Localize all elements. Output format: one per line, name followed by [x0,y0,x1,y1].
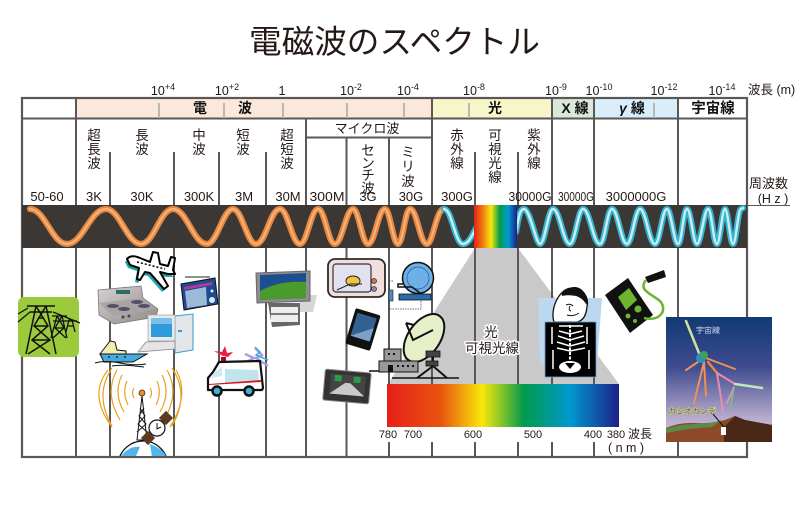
header ticks [159,103,654,118]
sub-band names: 紫 [527,128,541,143]
spectrum labels: 600 [464,429,482,441]
visible light label: 可視光線 [465,341,519,356]
frequency axis label [747,176,790,206]
icon: power lines [18,297,80,357]
sub-band names: 線 [488,170,502,185]
frequency labels: 30M [275,189,301,204]
icon: ambulance [208,346,268,396]
band names: 電 [193,100,207,116]
icon: watch [141,411,173,445]
wavelength scale: -4 [411,82,419,92]
sub-band names: 視 [488,142,502,157]
frequency labels: 300M [310,189,344,204]
frequency labels: 3M [235,189,253,204]
band names: X 線 [561,100,589,116]
wavelength scale: -8 [477,82,485,92]
frequency labels: 300K [184,189,215,204]
grid lines [22,98,747,457]
title: 電磁波のスペクトル [249,23,540,60]
visible light label: 光 [484,325,498,340]
sub-band names: 短 [236,128,250,143]
sub-band names: 波 [280,156,294,171]
sub-band names: 波 [192,142,206,157]
frequency labels: 30000G [558,189,594,204]
sub-band names: リ [401,159,415,174]
sub-band names: 超 [280,128,294,143]
ray showers [686,321,762,411]
wavelength scale: -2 [354,82,362,92]
sub-band names: 可 [488,128,502,143]
frequency labels [30,189,666,204]
spectrum labels: 400 [584,429,602,441]
sub-band names: セ [361,143,375,158]
spectrum scale mask [378,427,668,442]
wavelength scale: 10 [340,84,354,98]
icon: airplane [125,252,175,292]
band names: 光 [488,100,502,116]
icon: mobile phone [345,308,381,351]
rainbow segment [474,205,517,248]
visible light label [465,325,519,356]
sub-band names: ミ [401,145,415,160]
band names: 波 [238,100,252,116]
visible spectrum bar [387,384,619,427]
frequency labels: 3G [359,189,377,204]
spectrum labels [379,427,652,455]
frequency labels: 3K [86,189,102,204]
sub-band names: 長 [87,142,101,157]
frequency labels: 30G [399,189,423,204]
frequency axis label: (H z ) [758,192,788,206]
sub-band names: 短 [280,142,294,157]
spectrum labels: ( n m ) [608,441,644,455]
sub-band names: 波 [361,181,375,196]
sub-band names: 赤 [450,128,464,143]
wavelength scale: -10 [599,82,612,92]
sub-band names: ン [361,156,375,171]
spectrum labels: 波長 [628,427,652,441]
spectrum labels: 700 [404,429,422,441]
sub-band names: 超 [87,128,101,143]
sub-band names: マイクロ波 [335,121,399,136]
wavelength scale: +4 [165,82,175,92]
wavelength scale [151,82,795,98]
wavelength scale: 10 [151,84,165,98]
icon: broadcast tower with arcs [98,368,182,456]
cosmic ray label: 宇宙線 [696,325,720,335]
wavelength scale: 10 [215,84,229,98]
sub-band names: 線 [527,156,541,171]
frequency labels: 30000G [508,189,552,204]
wavelength scale: -9 [559,82,567,92]
spectrum labels: 500 [524,429,542,441]
wavelength scale: -12 [664,82,677,92]
spectrum labels: 780 [379,429,397,441]
wavelength scale: 10 [709,84,722,98]
icon: ship [95,341,147,367]
frequency labels: 30K [130,189,154,204]
wavelength scale: 1 [279,84,286,98]
sub-band names: 外 [527,142,541,157]
sub-band names [87,121,541,196]
icon: geiger counter [605,270,666,333]
projection of visible light [388,248,619,384]
icon: television [256,271,317,327]
frequency labels: 300G [441,189,473,204]
wave band [22,205,747,248]
band names: 宇宙線 [691,99,735,117]
band names [193,99,735,117]
icon: radio [181,277,218,310]
sub-band names: 波 [236,142,250,157]
detector label: カミオカンデ [668,406,716,416]
icon: satellite television [389,262,434,309]
sub-band names: 中 [192,128,206,143]
wavelength scale: 10 [586,84,599,98]
sub-band names: 線 [450,156,464,171]
wavelength scale: 波長 (m) [748,83,795,97]
icon: computer [138,314,193,353]
icon: microwave [328,259,385,297]
icon: stove [98,286,158,324]
band names: γ 線 [619,100,645,116]
sub-band names: 波 [135,142,149,157]
wavelength scale: 10 [463,84,477,98]
frequency labels: 50-60 [30,189,64,204]
panel: cosmic rays [666,317,772,442]
radio wave [30,209,444,244]
sub-band names: 長 [135,128,149,143]
wavelength scale: -14 [722,82,735,92]
header band fills [76,99,678,118]
infographic [18,26,794,458]
icon: parabolic antenna station [369,307,459,378]
ground [666,416,772,442]
sub-band names: 波 [87,156,101,171]
sub-band names: 光 [488,156,502,171]
light wave [444,208,743,244]
icon: car navigation [323,369,371,404]
sub-band names: 外 [450,142,464,157]
wavelength scale: +2 [229,82,239,92]
sub-band names: 波 [401,174,415,189]
wavelength scale: 10 [651,84,664,98]
frequency labels: 3000000G [606,189,666,204]
wavelength scale: 10 [397,84,411,98]
wavelength scale: 10 [545,84,559,98]
frequency axis label: 周波数 [749,176,788,191]
spectrum labels: 380 [607,429,625,441]
icon: x-ray [538,287,602,377]
icon: globe [119,440,167,456]
sub-band names: チ [361,168,375,183]
